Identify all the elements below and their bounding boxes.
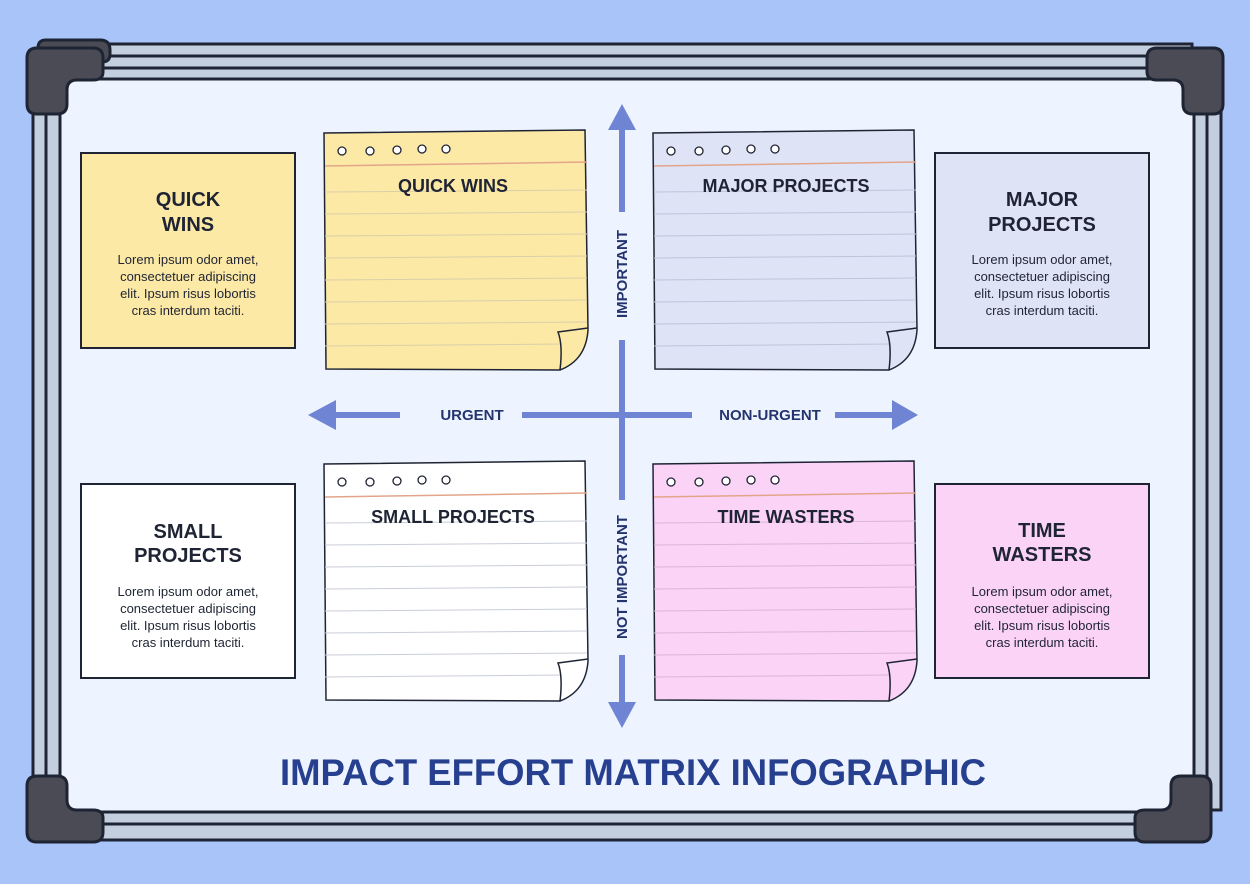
axis labels: URGENT: [440, 407, 504, 424]
note: time wasters: TIME WASTERS: [717, 507, 855, 527]
note: quick wins: [324, 130, 588, 370]
panel: small projects: [81, 484, 295, 678]
panel: time wasters: elit. Ipsum risus lobortis: [974, 618, 1110, 633]
panel: small projects: Lorem ipsum odor amet,: [118, 584, 258, 599]
arrows: axes: [308, 104, 918, 728]
panel: quick wins: cras interdum taciti.: [132, 303, 244, 318]
panel: quick wins: elit. Ipsum risus lobortis: [120, 286, 256, 301]
panel: major projects: MAJOR: [1006, 189, 1079, 211]
panel: quick wins: consectetuer adipiscing: [120, 269, 256, 284]
panel: small projects: SMALL: [154, 521, 222, 543]
panel: quick wins: QUICK: [156, 189, 221, 211]
panel: quick wins: Lorem ipsum odor amet,: [118, 252, 258, 267]
panel: major projects: Lorem ipsum odor amet,: [972, 252, 1112, 267]
panel: small projects: consectetuer adipiscing: [120, 601, 256, 616]
title: IMPACT EFFORT MATRIX INFOGRAPHIC: [280, 752, 986, 793]
panel: small projects: elit. Ipsum risus lobortis: [120, 618, 256, 633]
panel: quick wins: WINS: [162, 214, 214, 236]
panel: time wasters: consectetuer adipiscing: [974, 601, 1110, 616]
panel: major projects: elit. Ipsum risus lobortis: [974, 286, 1110, 301]
panel: time wasters: Lorem ipsum odor amet,: [972, 584, 1112, 599]
panel: major projects: [935, 153, 1149, 348]
axis labels: NOT IMPORTANT: [614, 515, 631, 639]
panel: time wasters: cras interdum taciti.: [986, 635, 1098, 650]
panel: time wasters: [935, 484, 1149, 678]
note: major projects: MAJOR PROJECTS: [702, 176, 870, 196]
panel: time wasters: TIME: [1018, 520, 1066, 542]
panel: major projects: cras interdum taciti.: [986, 303, 1098, 318]
note: small projects: [324, 461, 588, 701]
panel: small projects: cras interdum taciti.: [132, 635, 244, 650]
note: major projects: [653, 130, 917, 370]
axis labels: [440, 230, 821, 639]
note: time wasters: [653, 461, 917, 701]
axis labels: NON-URGENT: [719, 407, 821, 424]
panel: small projects: PROJECTS: [134, 545, 242, 567]
panel: major projects: PROJECTS: [988, 214, 1096, 236]
axis labels: IMPORTANT: [614, 230, 631, 318]
note: quick wins: QUICK WINS: [398, 176, 508, 196]
panel: major projects: consectetuer adipiscing: [974, 269, 1110, 284]
note: small projects: SMALL PROJECTS: [371, 507, 535, 527]
panel: quick wins: [81, 153, 295, 348]
panel: time wasters: WASTERS: [993, 544, 1091, 566]
